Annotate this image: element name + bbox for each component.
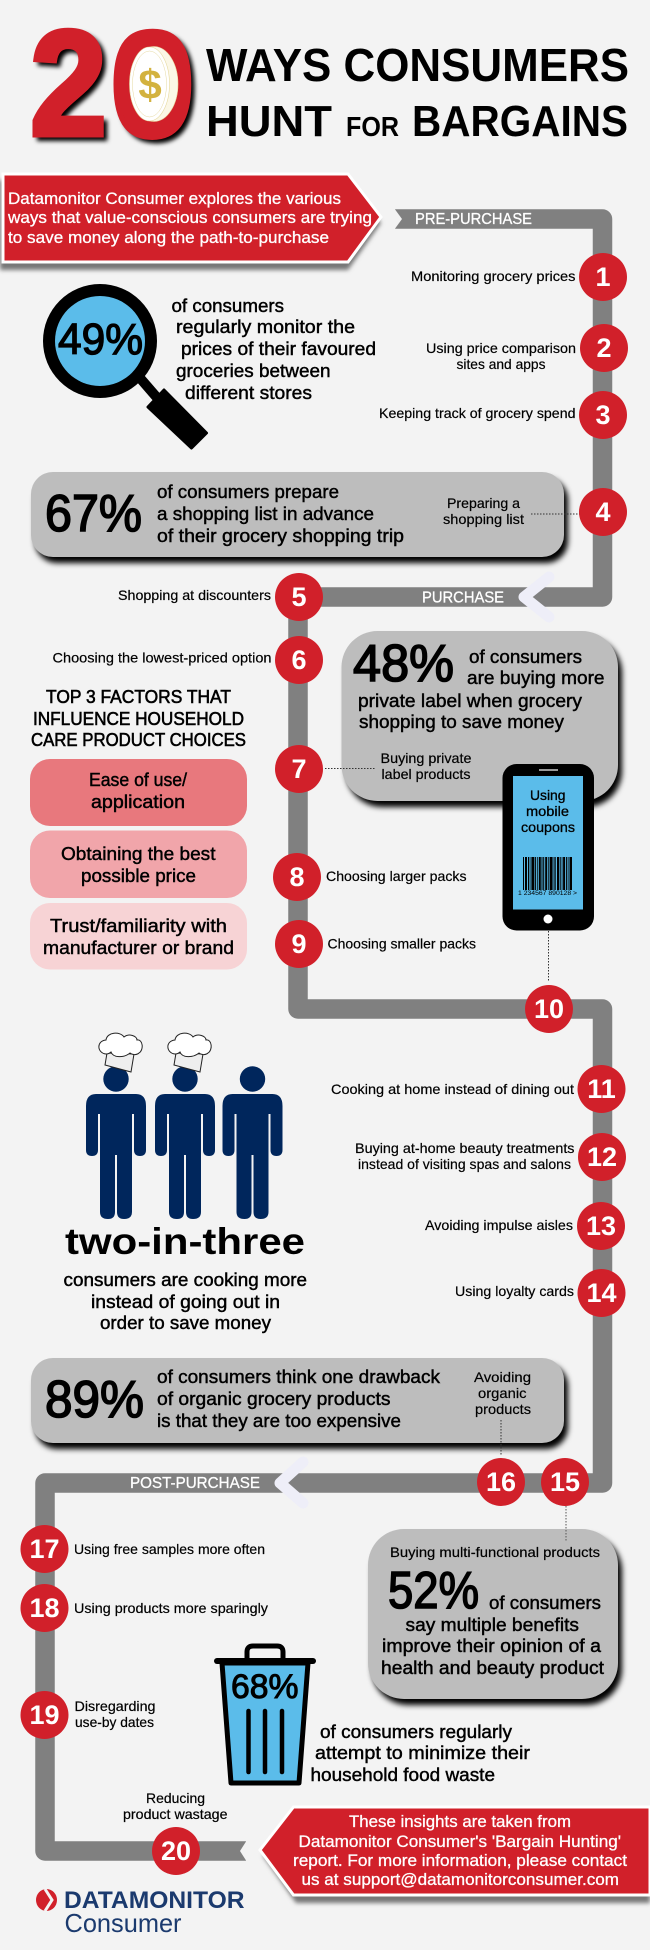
text: food waste statistic: of consumers regularly (320, 1721, 513, 1742)
step 2: sites and apps (456, 356, 546, 372)
text: food waste statistic: attempt to minimize their (315, 1742, 530, 1763)
chevron and stage label: purchase: PURCHASE (422, 590, 504, 606)
step 16 (477, 1458, 525, 1506)
step 6: Choosing the lowest-priced option (52, 650, 272, 666)
step 6 (52, 636, 323, 684)
stage label: pre-purchase: PRE-PURCHASE (415, 211, 532, 228)
panel: 52% multi-functional: of consumers (489, 1592, 601, 1613)
icon: phone with mobile coupons (502, 764, 594, 981)
text: cooking statistic: consumers are cooking more (64, 1269, 307, 1290)
step 11: Cooking at home instead of dining out (331, 1081, 574, 1097)
icon: magnifying glass with 49%: 49% (58, 315, 143, 364)
panel: 89% organic: products (475, 1401, 531, 1417)
panel: 67% shopping list: a shopping list in advance (157, 503, 374, 524)
logo: Datamonitor Consumer: Consumer (64, 1908, 182, 1938)
step 8: Choosing larger packs (326, 868, 466, 884)
step 5 (118, 573, 323, 621)
heading: top 3 factors: INFLUENCE HOUSEHOLD (33, 708, 244, 729)
step 10 (525, 985, 573, 1033)
step 9 (275, 920, 476, 968)
chef hat one (99, 1033, 142, 1072)
logo: Datamonitor Consumer (36, 1887, 244, 1938)
step 5: Shopping at discounters (118, 587, 271, 603)
chevron and stage label: purchase (422, 577, 549, 617)
big number 20 with coin: 2 (34, 3, 111, 171)
step 18 (20, 1584, 268, 1632)
step 11 (331, 1065, 626, 1113)
icon: trash bin with 68%: 68% (231, 1668, 298, 1706)
step 5: 5 (291, 582, 307, 612)
intro banner: to save money along the path-to-purchase (8, 228, 329, 247)
step 9: 9 (291, 929, 307, 959)
step 12: Buying at-home beauty treatments (355, 1140, 574, 1156)
step 7: 7 (291, 754, 307, 784)
barcode: 1 234567 890128 > (518, 891, 578, 897)
chef hat two (168, 1033, 211, 1072)
heading: top 3 factors: CARE PRODUCT CHOICES (31, 729, 246, 750)
panel: 48% private label: 48% (353, 635, 454, 693)
panel: 48% private label (342, 631, 622, 807)
icon: three people, two with chef hats (86, 1033, 282, 1219)
step 8: 8 (289, 862, 305, 892)
step 3 (379, 391, 627, 439)
intro banner (0, 174, 381, 270)
closing banner: These insights are taken from (349, 1812, 571, 1831)
heading: two-in-three: two-in-three (65, 1221, 305, 1262)
panel: 48% private label: are buying more (467, 667, 604, 688)
panel: 67% shopping list: Preparing a (447, 495, 520, 511)
step 14: 14 (586, 1278, 617, 1308)
factor 2 (30, 830, 247, 898)
title (30, 0, 629, 172)
panel: 48% private label: shopping to save money (359, 711, 565, 732)
text: cooking statistic: order to save money (100, 1312, 272, 1333)
panel: 89% organic (31, 1358, 568, 1456)
panel: 48% private label: of consumers (469, 646, 582, 667)
logo: Datamonitor Consumer: DATAMONITOR (64, 1887, 244, 1914)
step 15 (541, 1458, 589, 1506)
step 18: 18 (29, 1593, 60, 1623)
step 16: 16 (486, 1467, 516, 1497)
step 17 (20, 1525, 265, 1573)
panel: 52% multi-functional (368, 1506, 622, 1705)
step 14: Using loyalty cards (455, 1283, 574, 1299)
panel: 52% multi-functional: Buying multi-functional products (390, 1544, 600, 1560)
icon: phone with mobile coupons: Using (530, 787, 566, 803)
text: 49% statistic: prices of their favoured (181, 338, 376, 359)
chevron and stage label: post-purchase (130, 1462, 303, 1503)
closing banner: report. For more information, please contact (293, 1851, 627, 1870)
panel: 52% multi-functional: say multiple benefits (406, 1614, 579, 1635)
panel: 67% shopping list: shopping list (443, 511, 524, 527)
text: 49% statistic: of consumers (172, 295, 284, 316)
step 1 (411, 253, 627, 301)
text: cooking statistic (64, 1269, 307, 1333)
text: food waste statistic: household food waste (310, 1764, 495, 1785)
step 2: Using price comparison (426, 340, 576, 356)
heading: top 3 factors (31, 686, 246, 750)
factor 2: possible price (81, 865, 196, 886)
panel: 52% multi-functional: improve their opinion of a (382, 1635, 602, 1656)
icon: phone with mobile coupons: mobile (526, 803, 569, 819)
step 17: Using free samples more often (74, 1541, 265, 1557)
factor 2: Obtaining the best (61, 843, 216, 864)
title: WAYS CONSUMERS (206, 39, 629, 91)
chevron and stage label: post-purchase: POST-PURCHASE (130, 1475, 260, 1492)
icon: phone with mobile coupons: coupons (521, 819, 575, 835)
panel: 89% organic: of consumers think one drawback (157, 1366, 441, 1387)
panel: 67% shopping list: of consumers prepare (157, 481, 339, 502)
heading: top 3 factors: TOP 3 FACTORS THAT (46, 686, 231, 707)
panel: 89% organic: organic (478, 1385, 526, 1401)
panel: 67% shopping list: 67% (45, 485, 142, 543)
step 18: Using products more sparingly (74, 1600, 268, 1616)
text: 49% statistic: regularly monitor the (176, 316, 355, 337)
factor 3 (30, 903, 247, 970)
text: food waste statistic (310, 1721, 530, 1785)
text: 49% statistic: different stores (185, 382, 312, 403)
panel: 48% private label: label products (382, 766, 470, 782)
step 12: instead of visiting spas and salons (358, 1156, 571, 1172)
factor 3: Trust/familiarity with (50, 915, 227, 936)
closing banner (260, 1807, 650, 1903)
panel: 89% organic: Avoiding (474, 1369, 531, 1385)
title: FOR (346, 111, 399, 142)
panel: 89% organic: 89% (45, 1371, 144, 1429)
step 20: Reducing (146, 1790, 205, 1806)
person two (155, 1066, 215, 1219)
step 2: 2 (596, 333, 612, 363)
closing banner: us at support@datamonitorconsumer.com (302, 1870, 619, 1889)
panel: 48% private label: Buying private (380, 750, 472, 766)
step 20: 20 (161, 1836, 191, 1866)
icon: trash bin with 68% (214, 1646, 316, 1783)
step 9: Choosing smaller packs (328, 936, 476, 952)
step 6: 6 (291, 645, 307, 675)
step 4 (579, 488, 627, 536)
step 15: 15 (550, 1467, 580, 1497)
factor 1: application (91, 791, 185, 812)
step 7 (275, 745, 376, 793)
step 19: Disregarding (74, 1698, 156, 1714)
step 3: 3 (595, 400, 611, 430)
panel: 52% multi-functional: health and beauty product (381, 1657, 604, 1678)
big number 20 with coin (30, 0, 199, 172)
step 17: 17 (29, 1534, 60, 1564)
panel: 52% multi-functional: 52% (388, 1562, 479, 1620)
panel: 48% private label: private label when grocery (358, 690, 583, 711)
step 19: use-by dates (75, 1714, 154, 1730)
panel: 89% organic: is that they are too expensive (157, 1410, 401, 1431)
step 13: Avoiding impulse aisles (425, 1217, 573, 1233)
step 12: 12 (587, 1142, 617, 1172)
big number 20 with coin: $ (138, 61, 162, 108)
title: HUNT (206, 97, 332, 146)
text: 49% statistic (172, 295, 376, 403)
text: 49% statistic: groceries between (176, 360, 330, 381)
step 13 (425, 1202, 625, 1250)
step 3: Keeping track of grocery spend (379, 405, 576, 421)
closing banner: Datamonitor Consumer's 'Bargain Hunting' (298, 1832, 621, 1851)
step 13: 13 (586, 1211, 616, 1241)
big number 20 with coin: 0 (110, 0, 195, 168)
panel: 89% organic: of organic grocery products (157, 1388, 390, 1409)
intro banner: Datamonitor Consumer explores the various (8, 189, 341, 208)
person three (222, 1066, 282, 1219)
big number 20 with coin: 0 (114, 4, 199, 172)
step 4: 4 (595, 497, 611, 527)
step 1: Monitoring grocery prices (411, 268, 576, 284)
step 12 (355, 1133, 626, 1181)
step 11: 11 (587, 1074, 616, 1104)
panel: 67% shopping list (31, 472, 580, 563)
intro banner: ways that value-conscious consumers are trying (7, 208, 372, 227)
step 8 (273, 853, 466, 901)
factor 3: manufacturer or brand (43, 937, 234, 958)
person one (86, 1066, 146, 1219)
icon: magnifying glass with 49% (43, 284, 206, 448)
factor 1 (30, 759, 247, 826)
panel: 67% shopping list: of their grocery shopping trip (157, 525, 404, 546)
step 19: 19 (29, 1700, 60, 1730)
barcode (518, 874, 578, 897)
step 19 (20, 1691, 156, 1739)
title: BARGAINS (412, 97, 628, 146)
step 10: 10 (534, 994, 564, 1024)
step 14 (455, 1269, 626, 1317)
big number 20 with coin: 2 (30, 0, 107, 167)
factor 1: Ease of use/ (89, 769, 188, 790)
text: cooking statistic: instead of going out in (91, 1291, 280, 1312)
step 20: product wastage (123, 1806, 228, 1822)
step 20 (123, 1790, 228, 1875)
step 2 (426, 324, 628, 372)
step 1: 1 (595, 262, 611, 292)
path line connecting all steps (45, 208, 602, 1862)
